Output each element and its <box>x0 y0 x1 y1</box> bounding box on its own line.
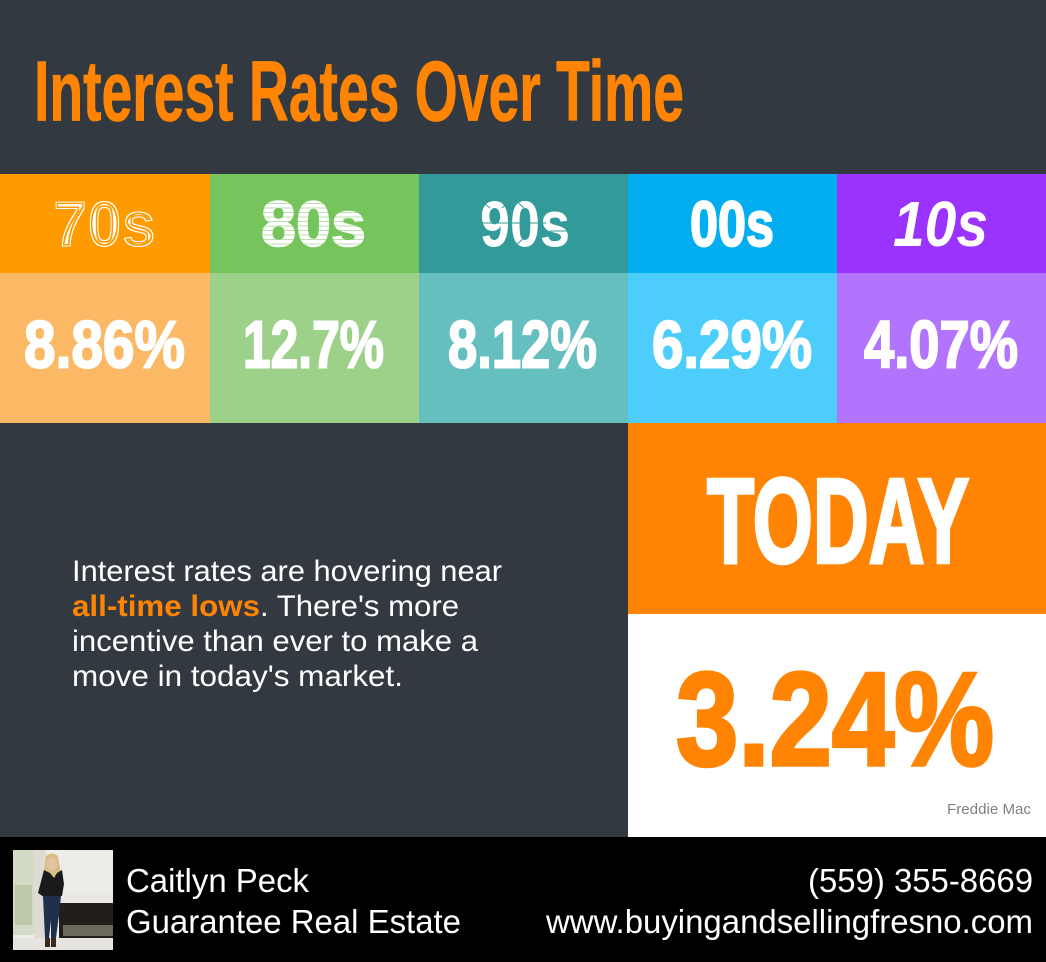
rate: 12.7%: 12.7% <box>243 308 384 382</box>
footer bar <box>0 837 1046 962</box>
text block: explanation: Interest rates are hovering near <box>72 555 502 588</box>
photo: agent portrait <box>13 850 113 950</box>
panel: decade columns <box>0 174 1046 423</box>
website: www.buyingandsellingfresno.com <box>545 903 1033 940</box>
text block: explanation: move in today's market. <box>72 660 403 693</box>
text block: explanation: . There's more <box>260 590 459 623</box>
agent name: Caitlyn Peck <box>126 862 309 899</box>
label: 10s: 10s <box>893 188 988 260</box>
label: 70s: 70s <box>53 188 156 260</box>
panel: 90s <box>419 174 628 423</box>
panel: 00s <box>628 174 837 423</box>
source: Freddie Mac <box>947 802 1031 818</box>
label: 80s: 80s <box>261 188 366 260</box>
panel: 80s <box>210 174 419 423</box>
rate: 3.24%: 3.24% <box>676 646 994 794</box>
label: 90s: 90s <box>480 188 570 260</box>
panel: 10s <box>837 174 1046 423</box>
text block: explanation: all-time lows <box>72 590 260 623</box>
panel: today <box>628 423 1046 837</box>
phone: (559) 355-8669 <box>808 862 1033 899</box>
panel: 70s <box>0 174 210 423</box>
rate: 8.86%: 8.86% <box>24 308 185 382</box>
rate: 6.29%: 6.29% <box>652 308 812 382</box>
label: 00s: 00s <box>690 188 774 260</box>
title: Interest Rates Over Time <box>34 44 684 140</box>
rate: 8.12%: 8.12% <box>448 308 597 382</box>
text block: explanation: incentive than ever to make a <box>72 625 479 658</box>
agent company: Guarantee Real Estate <box>126 903 461 940</box>
